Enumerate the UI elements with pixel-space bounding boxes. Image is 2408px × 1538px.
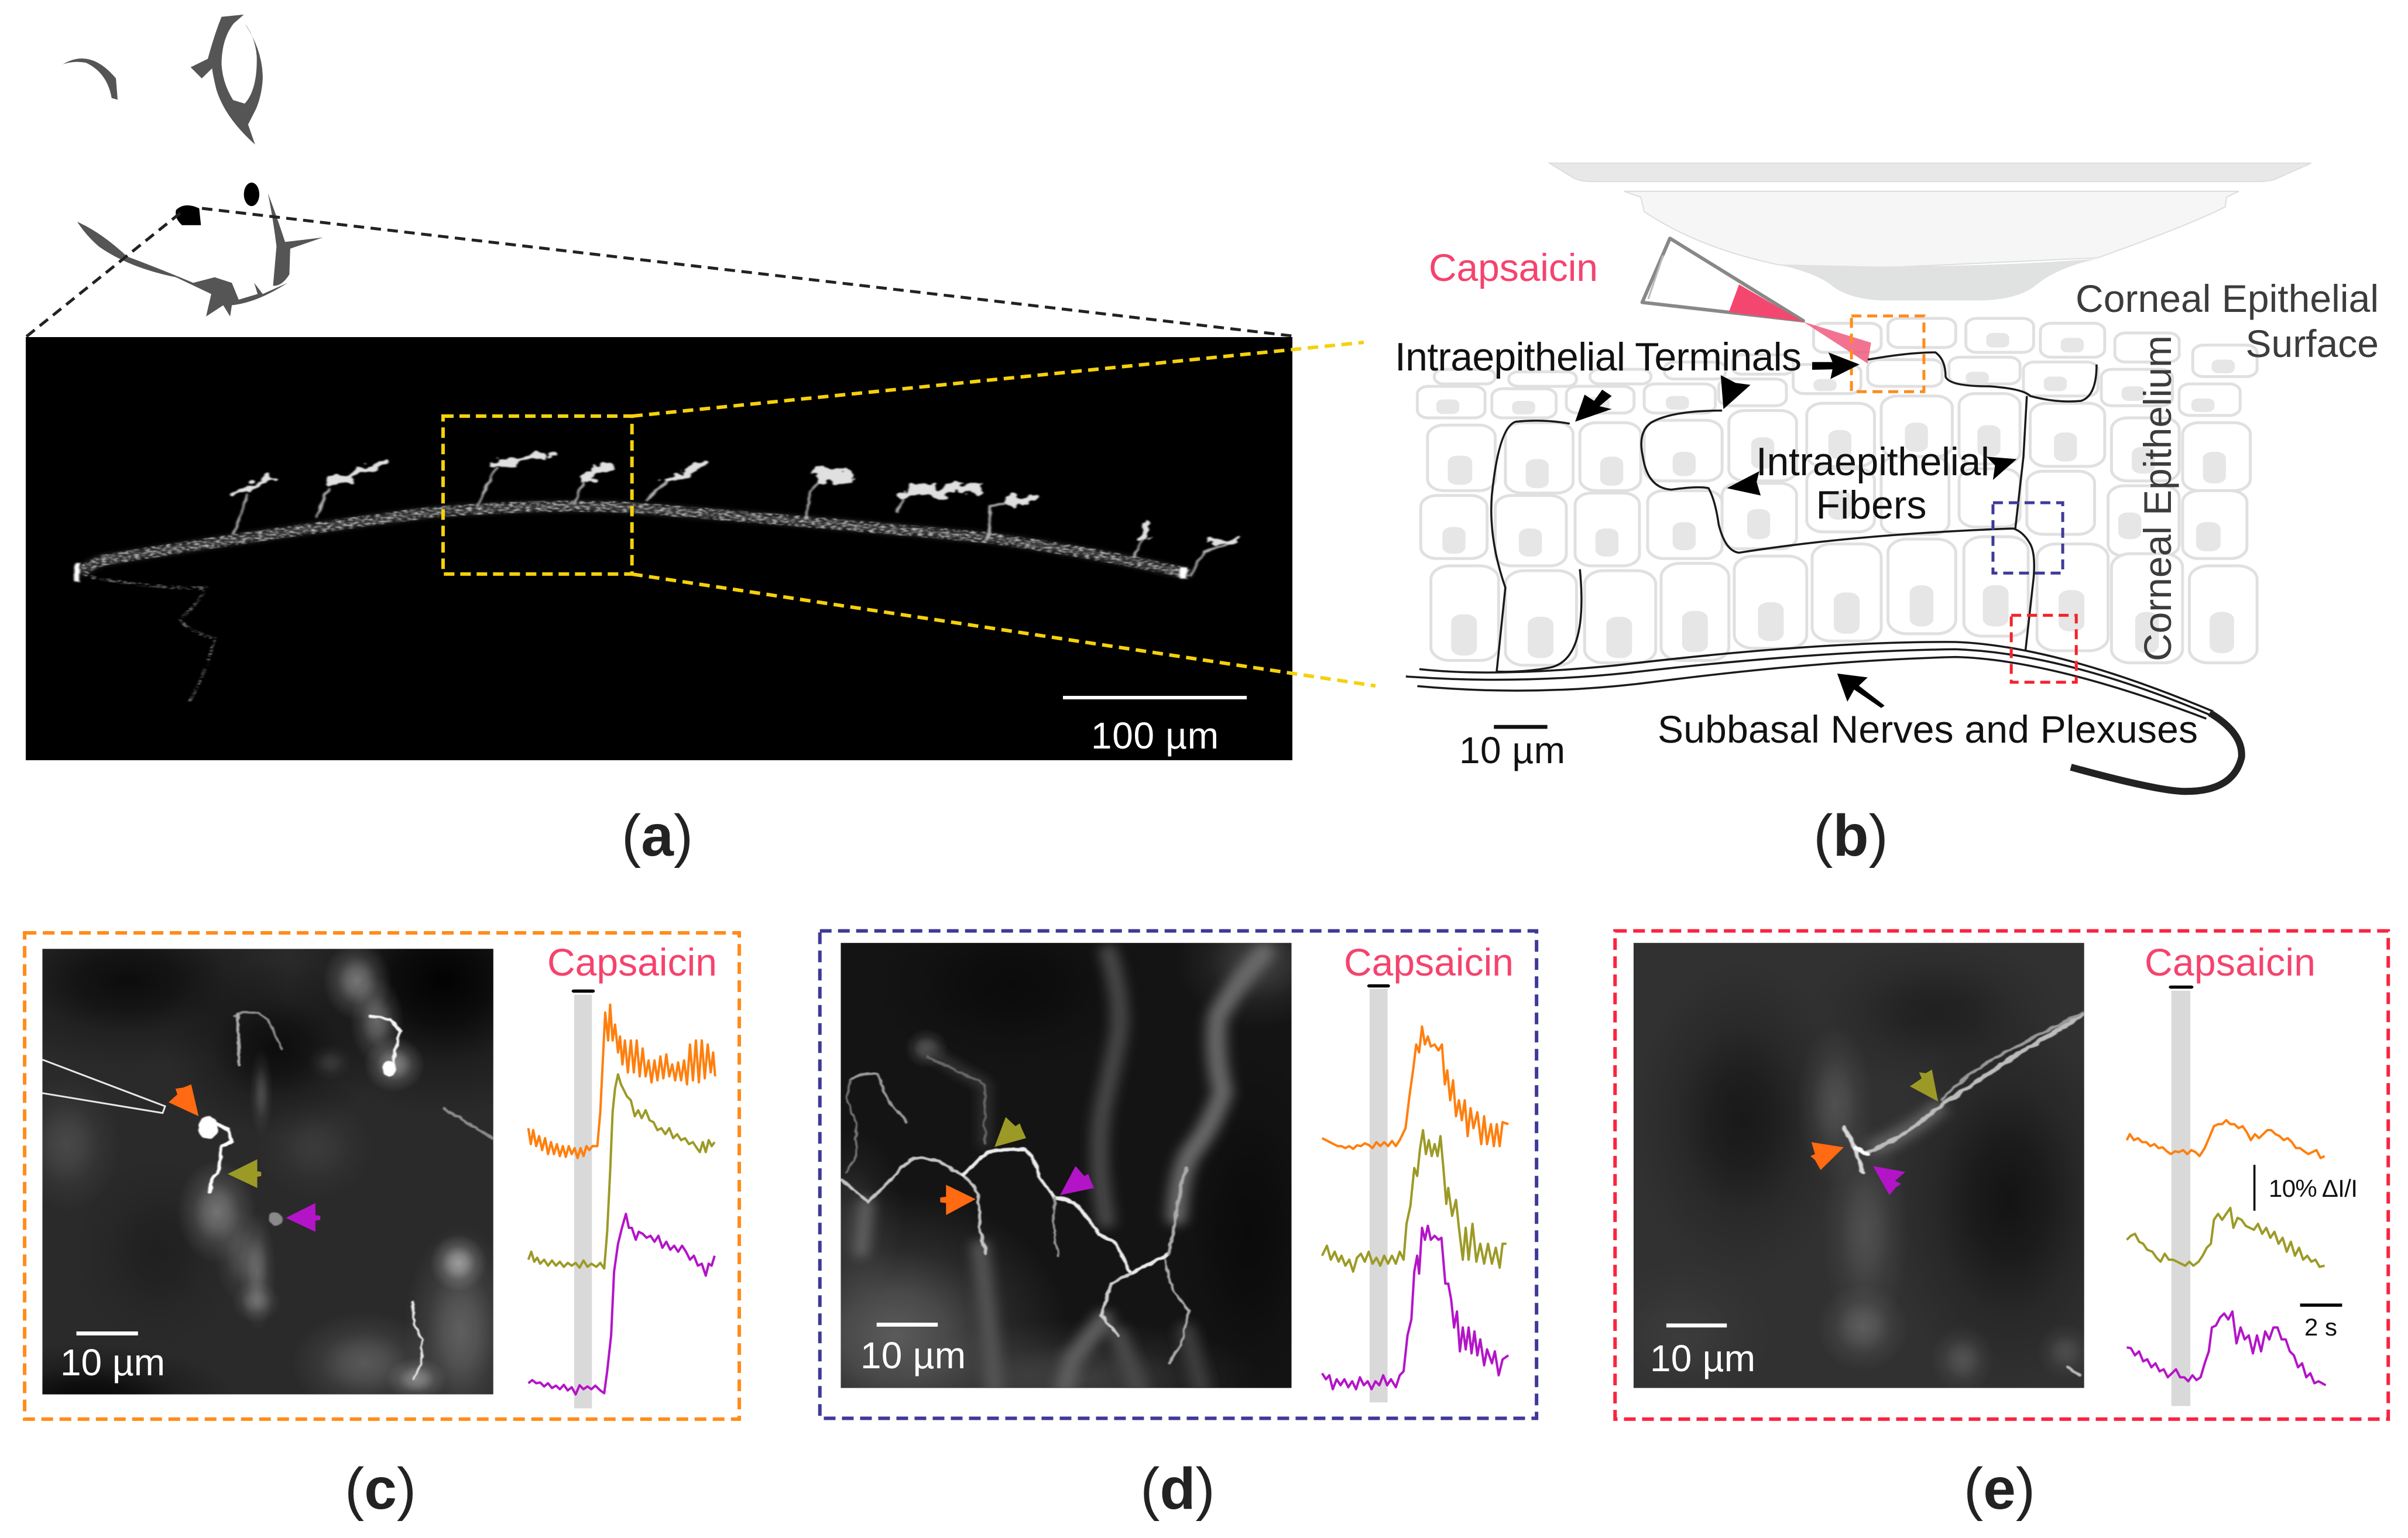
capsaicin stimulus bar: [1367, 984, 1390, 1402]
panel b: cornea schematic: [1395, 163, 2379, 868]
scale label: 10 µm: [60, 1341, 165, 1383]
yellow dashed zoom lines: [632, 342, 1375, 686]
objective lens: [1549, 163, 2311, 300]
arrow markers: [169, 1084, 320, 1232]
micrograph e: [1633, 943, 2084, 1388]
calcium traces: [529, 1005, 715, 1395]
icon: mouse head outline: [63, 15, 323, 317]
scale label: 10 µm: [860, 1334, 966, 1376]
panel e: subbasal imaging: [1589, 931, 2388, 1522]
label (b): (b): [1813, 803, 1888, 868]
microscope image: subbasal nerve: [26, 337, 1292, 760]
capsaicin label: Capsaicin: [2145, 940, 2316, 984]
panel c: terminals imaging: [23, 931, 741, 1521]
scale bar: [1666, 1323, 1727, 1327]
capsaicin stimulus bar: [572, 990, 595, 1408]
scale bar: [877, 1323, 938, 1327]
intraepithelial fibers label: Intraepithelial: [1756, 440, 1989, 484]
intraepithelial terminals label: Intraepithelial Terminals: [1395, 335, 1802, 379]
arrow markers: [1810, 1070, 1938, 1195]
panel d: fibers imaging: [818, 929, 1538, 1521]
micrograph c: [42, 949, 493, 1395]
time label: 2 s: [2304, 1313, 2337, 1341]
panel e content: [1589, 931, 2388, 1419]
micrograph d: [841, 943, 1291, 1388]
label (c): (c): [345, 1456, 416, 1522]
scale bar 100 um: 100 µm: [1091, 715, 1219, 757]
label (d): (d): [1140, 1456, 1215, 1522]
red dashed frame: [1615, 931, 2388, 1419]
capsaicin label: Capsaicin: [547, 940, 717, 984]
yellow dashed region box: [443, 416, 632, 574]
capsaicin label: Capsaicin: [1344, 940, 1514, 984]
scale bar: [1494, 725, 1548, 729]
epithelial cells: [1417, 318, 2257, 665]
intraepithelial fibers label: Fibers: [1816, 483, 1926, 527]
corneal epithelium rotated label: Corneal Epithelium: [2136, 335, 2179, 661]
scale label 10 um: 10 µm: [1459, 729, 1565, 771]
calcium traces: [1322, 1027, 1508, 1389]
amplitude scale bar: [2253, 1165, 2255, 1211]
panel d content: [818, 929, 1538, 1420]
scale label: 10 µm: [1650, 1337, 1755, 1379]
label (e): (e): [1964, 1456, 2035, 1522]
black dashed zoom lines: [26, 208, 1292, 337]
corneal epithelial surface label: Corneal Epithelial: [2076, 277, 2379, 320]
orange dashed frame: [25, 933, 739, 1419]
black arrows: [1575, 352, 2016, 708]
capsaicin pipette: [1642, 238, 1871, 363]
amplitude label: 10% ΔI/I: [2269, 1175, 2358, 1202]
corneal epithelial surface label: Surface: [2246, 322, 2379, 365]
blue dashed frame: [820, 931, 1536, 1419]
calcium traces: [2127, 1120, 2325, 1385]
pipette outline: [42, 1060, 165, 1113]
intraepithelial nerve fibers: [1491, 352, 2097, 672]
schematic drawing: objective, cells, nerves: [1406, 163, 2311, 791]
intraepithelial fibers label: [1756, 440, 1989, 527]
scale bar: [77, 1331, 138, 1336]
panel c content: [23, 931, 741, 1421]
subbasal nerve bundle: [1406, 642, 2242, 791]
subbasal nerves label: Subbasal Nerves and Plexuses: [1658, 708, 2198, 751]
scale bar 100 um: [1063, 696, 1247, 757]
capsaicin stimulus bar: [2169, 986, 2193, 1406]
panel a: mouse head and nerve image: [26, 15, 1375, 868]
time scale bar: [2300, 1303, 2342, 1307]
corneal epithelial surface label: [2076, 277, 2379, 365]
capsaicin label: Capsaicin: [1429, 246, 1598, 289]
label (a): (a): [622, 803, 693, 868]
arrow markers: [940, 1117, 1094, 1215]
dashed region boxes: [1851, 316, 2076, 682]
